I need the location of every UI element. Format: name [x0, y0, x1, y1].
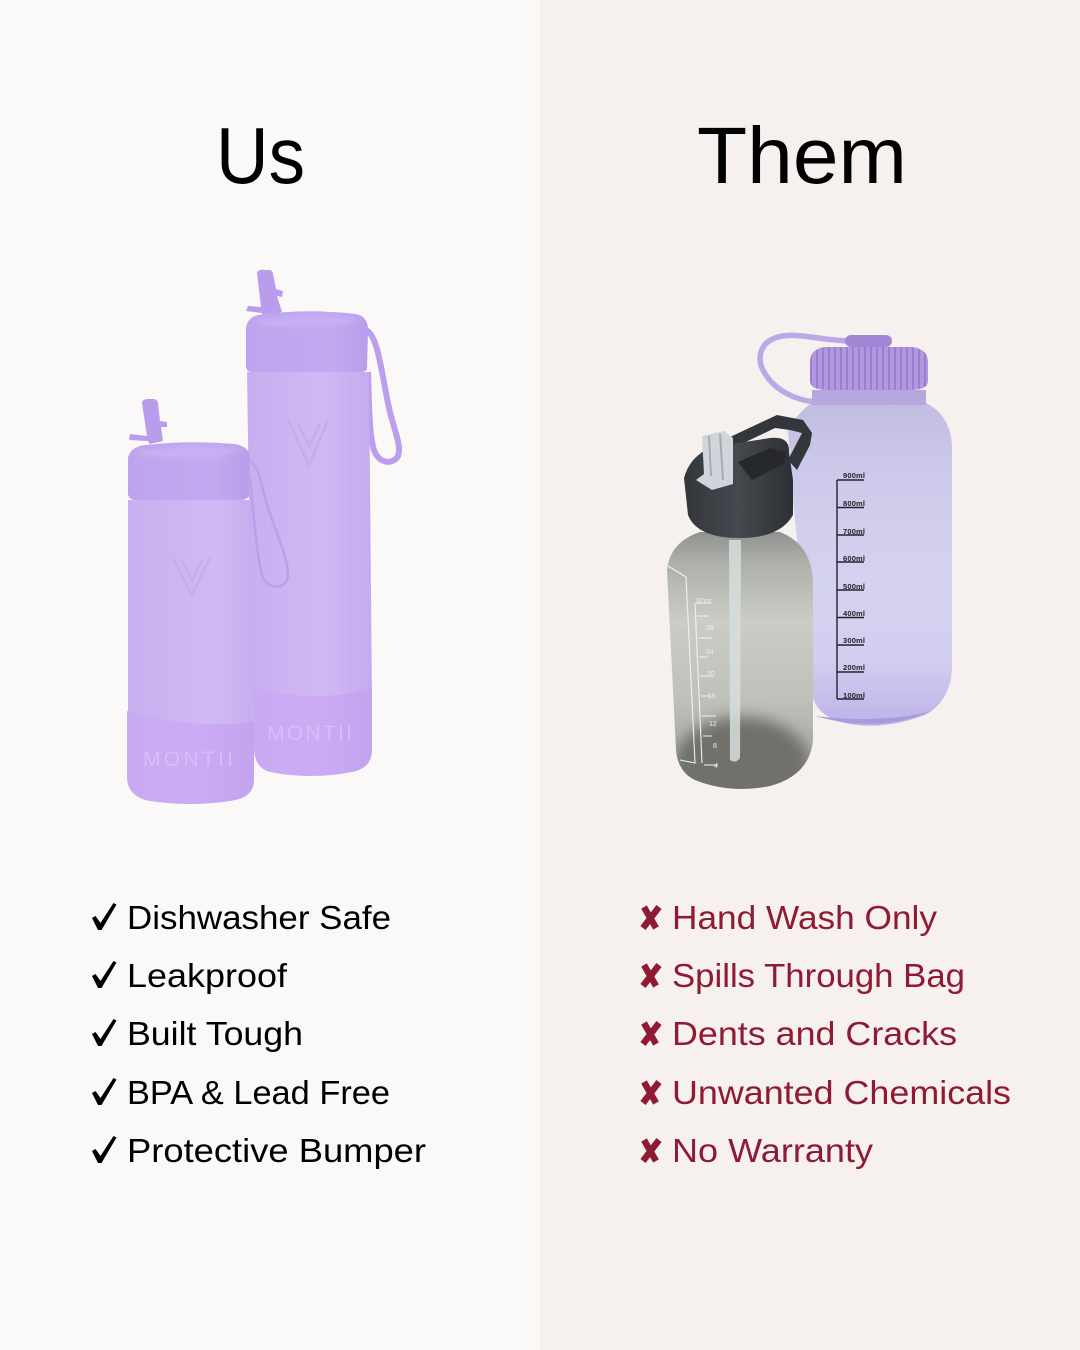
illustration: grey bottle with black flip lid: 8 [713, 743, 717, 750]
illustration: clear purple bottle with measurement scale: 700ml [843, 527, 865, 536]
illustration: grey bottle with black flip lid: 28 [706, 625, 714, 632]
illustration: clear purple bottle with measurement scale: 200ml [843, 663, 865, 672]
illustration: grey bottle with black flip lid: 24 [706, 649, 714, 656]
illustration: short purple bottle [127, 399, 288, 804]
item: Spills Through Bag: Spills Through Bag [672, 957, 965, 994]
illustration: tall purple bottle: MONTII [267, 722, 352, 745]
item: No Warranty: No Warranty [672, 1132, 874, 1169]
heading: Them: Them [697, 111, 907, 200]
illustration: short purple bottle: MONTII [143, 748, 233, 771]
list: us benefits [92, 899, 426, 1169]
illustration: clear purple bottle with measurement scale: 800ml [843, 499, 865, 508]
illustration: grey bottle with black flip lid: 20 [707, 671, 715, 678]
illustration: clear purple bottle with measurement scale: 900ml [843, 471, 865, 480]
item: Leakproof: Leakproof [127, 957, 288, 994]
illustration: grey bottle with black flip lid: 4 [714, 763, 718, 770]
panel: them background [540, 0, 1080, 1350]
illustration: grey bottle with black flip lid: 32oz [696, 598, 712, 605]
illustration: grey bottle with black flip lid: 12 [709, 721, 717, 728]
illustration: clear purple bottle with measurement scale [760, 335, 952, 726]
illustration: grey bottle with black flip lid [667, 415, 813, 813]
item: Dents and Cracks: Dents and Cracks [672, 1015, 957, 1052]
heading: Us: Us [216, 111, 305, 200]
illustration: clear purple bottle with measurement scale: 400ml [843, 609, 865, 618]
illustration: clear purple bottle with measurement scale: 300ml [843, 636, 865, 645]
panel: us background [0, 0, 540, 1350]
item: Unwanted Chemicals: Unwanted Chemicals [672, 1074, 1011, 1111]
item: Protective Bumper: Protective Bumper [127, 1132, 426, 1169]
illustration: clear purple bottle with measurement scale: 600ml [843, 554, 865, 563]
illustration: clear purple bottle with measurement scale: 500ml [843, 582, 865, 591]
illustration: clear purple bottle with measurement scale: 100ml [843, 691, 865, 700]
item: Built Tough: Built Tough [127, 1015, 303, 1052]
list: them drawbacks [643, 899, 1011, 1169]
illustration: grey bottle with black flip lid: 16 [708, 693, 716, 700]
item: Dishwasher Safe: Dishwasher Safe [127, 899, 391, 936]
item: Hand Wash Only: Hand Wash Only [672, 899, 938, 936]
illustration: tall purple bottle [246, 270, 399, 776]
item: BPA & Lead Free: BPA & Lead Free [127, 1074, 390, 1111]
